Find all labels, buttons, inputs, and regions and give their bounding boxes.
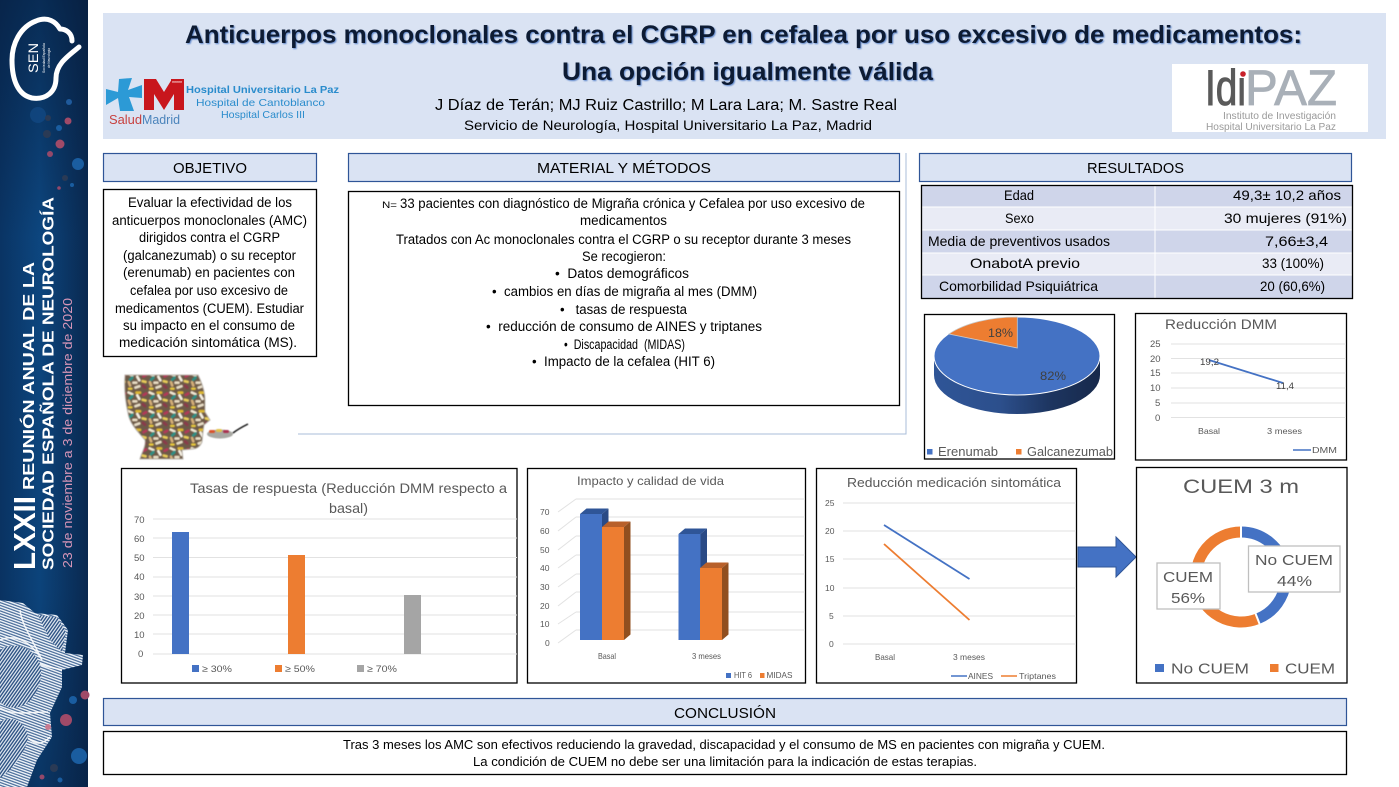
table: patient results: OnabotA previo	[970, 255, 1080, 271]
chart: Tasas de respuesta bars: 10	[134, 630, 145, 641]
chart: Impacto y calidad de vida 3D bars	[528, 468, 806, 683]
chart: pie Erenumab vs Galcanezumab	[924, 314, 1114, 459]
table: patient results: Sexo	[1005, 210, 1034, 226]
decorative node dots	[30, 99, 84, 190]
icon: IdiPAZ logo	[1172, 60, 1368, 133]
table: patient results: Edad	[1004, 187, 1034, 203]
heading: OBJETIVO: OBJETIVO	[173, 160, 247, 177]
chart: Impacto y calidad de vida 3D bars: 40	[540, 563, 550, 573]
heading: MATERIAL Y MÉTODOS: MATERIAL Y MÉTODOS	[537, 160, 711, 177]
panel: objetivo text: Evaluar la efectividad de los	[128, 195, 292, 210]
chart: Impacto y calidad de vida 3D bars: Basal	[598, 651, 616, 661]
icon: IdiPAZ logo: Instituto de Investigación	[1223, 111, 1336, 122]
panel: material y métodos text: 33 pacientes con diagnóstico de Migraña crónica y Cefalea por uso excesivo de	[400, 196, 865, 211]
chart: Tasas de respuesta bars: ≥ 50%	[285, 664, 316, 675]
heading: RESULTADOS: RESULTADOS	[1087, 160, 1184, 177]
chart: Reducción medicación sintomática lines: 5	[829, 611, 834, 621]
panel: conclusion text	[104, 732, 1346, 774]
chart: Impacto y calidad de vida 3D bars: 60	[540, 526, 550, 536]
chart: Impacto y calidad de vida 3D bars: 20	[540, 601, 550, 611]
chart: Reducción medicación sintomática lines: 3 meses	[953, 652, 985, 662]
icon: SEN logo: de Neurología	[47, 48, 51, 68]
illustration: head full of pills with spoon	[125, 375, 248, 459]
affiliation: Servicio de Neurología, Hospital Universitario La Paz, Madrid	[464, 118, 872, 133]
chart: Reducción medicación sintomática lines: 10	[825, 583, 835, 593]
panel: objetivo text: cefalea por uso excesivo de	[130, 283, 288, 298]
chart: Reducción medicación sintomática lines: Triptanes	[1019, 671, 1056, 681]
chart: Impacto y calidad de vida 3D bars: 10	[540, 619, 550, 629]
icon: SaludMadrid hospital logo: Salud	[109, 112, 142, 127]
icon: SaludMadrid hospital logo	[106, 78, 184, 127]
panel: material y métodos text: • Impacto de la cefalea (HIT 6)	[532, 354, 715, 369]
panel: material y métodos text: Se recogieron:	[582, 249, 666, 264]
header panel	[103, 13, 1386, 139]
chart: Impacto y calidad de vida 3D bars: 3 meses	[692, 651, 721, 661]
panel: material y métodos text: • Datos demográficos	[555, 266, 689, 281]
icon: SEN logo	[12, 19, 79, 98]
panel: objetivo text: dirigidos contra el CGRP	[139, 230, 280, 245]
chart: Tasas de respuesta bars: 70	[134, 515, 145, 526]
chart: pie Erenumab vs Galcanezumab: 18%	[988, 326, 1013, 340]
callout: CUEM 56%: CUEM	[1163, 569, 1213, 586]
chart: Impacto y calidad de vida 3D bars: Impacto y calidad de vida	[577, 474, 724, 488]
icon: IdiPAZ logo: Idi	[1205, 60, 1246, 116]
chart: Tasas de respuesta bars: ≥ 70%	[367, 664, 398, 675]
hospital names: Hospital Carlos III	[221, 109, 305, 121]
arrow: to CUEM result	[1078, 537, 1136, 577]
panel: objetivo text: (galcanezumab) o su receptor	[123, 248, 296, 263]
panel: material y métodos text	[348, 192, 900, 406]
chart: Tasas de respuesta bars: 20	[134, 611, 145, 622]
panel: material y métodos text: • tasas de respuesta	[560, 302, 687, 317]
chart: Reducción DMM line: 25	[1150, 339, 1161, 350]
sidebar: congress banner	[0, 0, 90, 787]
chart: Tasas de respuesta bars: 30	[134, 592, 145, 603]
callout: No CUEM 44%: 44%	[1277, 573, 1312, 590]
table: patient results: 7,66±3,4	[1265, 233, 1328, 249]
chart: Reducción medicación sintomática lines: 25	[825, 498, 835, 508]
chart: Reducción DMM line: 11,4	[1276, 381, 1294, 392]
panel: objetivo text: su impacto en el consumo de	[123, 318, 295, 333]
table: patient results	[922, 186, 1352, 298]
chart: Reducción DMM line: 10	[1150, 383, 1161, 394]
congress title: LXXII	[7, 496, 42, 570]
chart: Impacto y calidad de vida 3D bars: 0	[545, 638, 550, 648]
chart: CUEM 3 m doughnut: CUEM	[1285, 660, 1335, 678]
hospital names	[186, 84, 339, 121]
chart: CUEM 3 m doughnut: No CUEM	[1171, 660, 1249, 678]
icon: IdiPAZ logo: Hospital Universitario La Paz	[1206, 122, 1336, 133]
callout: CUEM 56%: 56%	[1171, 590, 1205, 607]
panel: conclusion text: La condición de CUEM no debe ser una limitación para la indicación de estas terapias.	[473, 755, 977, 769]
chart: Reducción medicación sintomática lines: 15	[825, 554, 835, 564]
chart: Reducción medicación sintomática lines: AINES	[968, 671, 993, 681]
heading: RESULTADOS	[920, 154, 1352, 182]
icon: SaludMadrid hospital logo: *****	[172, 81, 182, 87]
chart: Reducción DMM line: 0	[1155, 413, 1160, 424]
callout: No CUEM 44%: No CUEM	[1255, 552, 1333, 569]
chart: Reducción medicación sintomática lines: 0	[829, 639, 834, 649]
chart: Tasas de respuesta bars: ≥ 30%	[202, 664, 233, 675]
panel: objetivo text	[104, 190, 316, 356]
icon: IdiPAZ logo: PAZ	[1245, 60, 1337, 116]
chart: Impacto y calidad de vida 3D bars: 70	[540, 507, 550, 517]
chart: Impacto y calidad de vida 3D bars: MIDAS	[766, 670, 793, 680]
authors: J Díaz de Terán; MJ Ruiz Castrillo; M Lara Lara; M. Sastre Real	[435, 97, 897, 114]
panel: objetivo text: medicamentos (CUEM). Estudiar	[115, 301, 304, 316]
panel: conclusion text: Tras 3 meses los AMC son efectivos reduciendo la gravedad, discapacidad y el consumo de MS en pacientes con migraña y CUEM.	[343, 738, 1105, 752]
chart: pie Erenumab vs Galcanezumab: 82%	[1040, 369, 1066, 383]
congress title: REUNIÓN ANUAL DE LA	[19, 261, 38, 490]
chart: Reducción DMM line: 3 meses	[1267, 426, 1302, 436]
panel: material y métodos text: N=	[382, 200, 398, 211]
chart: CUEM 3 m doughnut	[1136, 468, 1347, 683]
chart: Tasas de respuesta bars: basal)	[329, 500, 368, 516]
chart: Reducción DMM line: Reducción DMM	[1165, 316, 1277, 332]
title	[185, 21, 1302, 86]
table: patient results: 49,3± 10,2 años	[1233, 187, 1341, 203]
title: Una opción igualmente válida	[562, 58, 934, 86]
heading: MATERIAL Y MÉTODOS	[348, 154, 900, 182]
chart: Reducción DMM line: Basal	[1198, 426, 1220, 436]
chart: Reducción DMM line: DMM	[1312, 445, 1337, 455]
chart: pie Erenumab vs Galcanezumab: Erenumab	[938, 445, 998, 459]
icon: SaludMadrid hospital logo: Madrid	[142, 112, 180, 127]
chart: Reducción medicación sintomática lines: 20	[825, 526, 835, 536]
hospital names: Hospital Universitario La Paz	[186, 84, 339, 96]
congress title	[7, 196, 75, 570]
chart: Tasas de respuesta bars: Tasas de respuesta (Reducción DMM respecto a	[190, 480, 507, 496]
panel: material y métodos text: • cambios en días de migraña al mes (DMM)	[492, 284, 757, 299]
icon: SEN logo: Sociedad Española	[42, 43, 46, 73]
chart: Reducción medicación sintomática lines: Reducción medicación sintomática	[847, 476, 1061, 490]
panel: objetivo text: medicación sintomática (MS).	[119, 335, 297, 350]
callout: CUEM 56%	[1157, 563, 1220, 609]
congress title: SOCIEDAD ESPAÑOLA DE NEUROLOGÍA	[38, 196, 58, 570]
panel: objetivo text: anticuerpos monoclonales (AMC)	[112, 213, 307, 228]
congress title: 23 de noviembre a 3 de diciembre de 2020	[61, 298, 75, 568]
chart: CUEM 3 m doughnut: CUEM 3 m	[1183, 477, 1299, 498]
table: patient results: 30 mujeres (91%)	[1224, 210, 1347, 226]
heading: OBJETIVO	[104, 154, 316, 182]
chart: Tasas de respuesta bars: 40	[134, 572, 145, 583]
table: patient results: 20 (60,6%)	[1260, 278, 1325, 294]
panel: objetivo text: (erenumab) en pacientes con	[123, 265, 295, 280]
table: patient results: 33 (100%)	[1262, 255, 1324, 271]
panel: material y métodos text: • reducción de consumo de AINES y triptanes	[486, 319, 762, 334]
table: patient results: Media de preventivos usados	[928, 233, 1110, 249]
chart: Impacto y calidad de vida 3D bars: 30	[540, 582, 550, 592]
chart: Reducción DMM line	[1136, 314, 1346, 460]
chart: Impacto y calidad de vida 3D bars: HIT 6	[734, 670, 752, 680]
bars: Basal	[580, 508, 630, 640]
panel: material y métodos text: Tratados con Ac monoclonales contra el CGRP o su receptor durante 3 meses	[396, 232, 851, 247]
chart: Reducción medicación sintomática lines	[816, 468, 1076, 683]
heading: CONCLUSIÓN: CONCLUSIÓN	[674, 705, 776, 722]
chart: Reducción DMM line: 5	[1155, 398, 1160, 409]
hospital names: Hospital de Cantoblanco	[196, 97, 325, 109]
chart: Reducción medicación sintomática lines: Basal	[875, 652, 895, 662]
panel: material y métodos text: medicamentos	[580, 213, 667, 228]
chart: Impacto y calidad de vida 3D bars: 50	[540, 545, 550, 555]
callout: No CUEM 44%	[1248, 546, 1340, 592]
chart: Tasas de respuesta bars	[122, 468, 517, 683]
title: Anticuerpos monoclonales contra el CGRP en cefalea por uso excesivo de medicamentos:	[185, 21, 1302, 49]
illustration: wireframe brain	[0, 600, 90, 787]
icon: SEN logo: SEN	[25, 43, 41, 73]
heading: CONCLUSIÓN	[104, 698, 1346, 726]
chart: Reducción DMM line: 20	[1150, 354, 1161, 365]
table: patient results: Comorbilidad Psiquiátrica	[939, 278, 1098, 294]
panel: material y métodos text: • Discapacidad (MIDAS)	[564, 337, 685, 352]
chart: Reducción DMM line: 15	[1150, 368, 1161, 379]
chart: Tasas de respuesta bars: 0	[138, 649, 143, 660]
chart: Tasas de respuesta bars: 60	[134, 534, 145, 545]
chart: Tasas de respuesta bars: 50	[134, 553, 145, 564]
chart: pie Erenumab vs Galcanezumab: Galcanezumab	[1027, 445, 1113, 459]
chart: Reducción DMM line: 19,2	[1200, 357, 1219, 368]
bars: 3 meses	[678, 528, 728, 640]
